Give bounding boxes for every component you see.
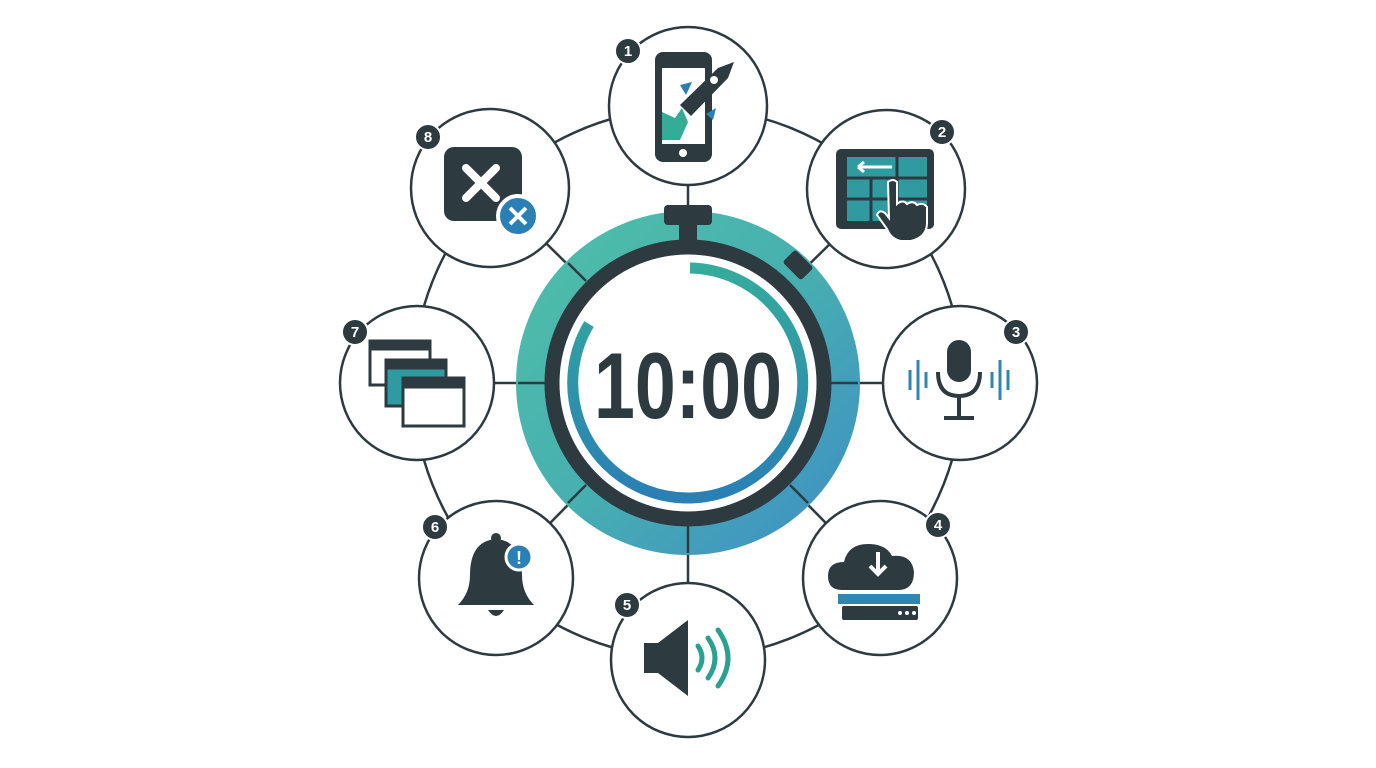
number badges: 5 (623, 597, 631, 614)
satellite circles (340, 27, 1037, 737)
crown (664, 205, 712, 225)
number badges: 8 (424, 129, 432, 146)
icon 5: speaker (644, 620, 728, 696)
icon 4: cloud download (828, 544, 920, 620)
number badges: 6 (431, 519, 439, 536)
icon 6: bell: ! (516, 548, 522, 568)
number badges: 1 (624, 43, 632, 60)
icon 3: microphone (910, 340, 1008, 420)
progress arc (573, 268, 803, 498)
icon 2: tablet tap (836, 149, 934, 241)
connecting ring (413, 106, 963, 660)
number badges: 7 (351, 324, 359, 341)
number badges: 4 (934, 517, 943, 534)
number badges (342, 38, 1029, 618)
icon 7: windows (370, 341, 464, 426)
number badges: 3 (1012, 324, 1020, 341)
time text: 10:00 (594, 333, 782, 438)
icon 1: phone rocket (655, 52, 734, 162)
icon 8: close (444, 147, 538, 236)
icon 6: bell (458, 533, 534, 616)
stopwatch (518, 205, 858, 553)
number badges: 2 (938, 124, 946, 141)
side button (782, 249, 814, 281)
